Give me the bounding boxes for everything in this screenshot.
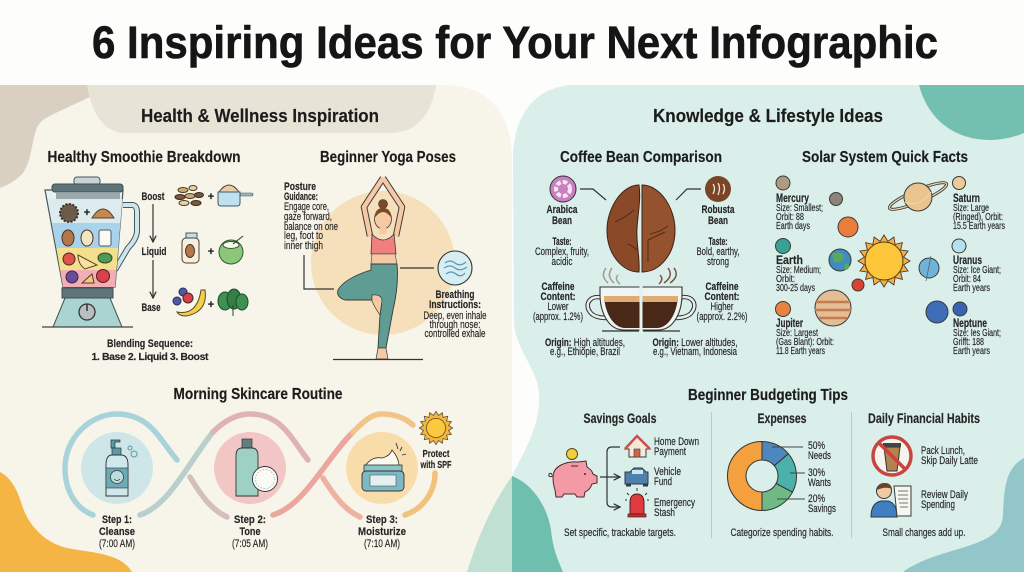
- text: robusta: e.g., Vietnam, Indonesia: [653, 346, 738, 358]
- text: jupiter: Jupiter: [776, 317, 803, 330]
- heading: Coffee Bean Comparison: [560, 149, 722, 166]
- text: breathing instructions: Instructions:: [429, 299, 481, 311]
- section: skincare routine: [65, 386, 453, 550]
- text: posture guidance: Guidance:: [284, 191, 318, 203]
- step 2 label: Tone: [240, 526, 260, 538]
- icon: sun: [858, 235, 910, 287]
- icon: car: [625, 468, 648, 486]
- step 1 circle and cleanser: [81, 432, 153, 504]
- step 3 label: Moisturize: [358, 526, 406, 538]
- text: breathing instructions: [424, 289, 486, 340]
- icon: robusta steam over cup: [659, 268, 676, 284]
- donut labels: Needs: [808, 450, 831, 462]
- text: mercury: [776, 192, 823, 232]
- heading: Healthy Smoothie Breakdown: [48, 149, 240, 166]
- text: jupiter: [776, 317, 834, 357]
- icon: almond milk and coconut: [182, 233, 243, 264]
- text: savings targets: Emergency: [654, 497, 695, 509]
- section: budgeting tips: [549, 387, 980, 539]
- protect with SPF label: [420, 448, 452, 471]
- protect with SPF label: Protect: [422, 448, 450, 460]
- text: arabica: (approx. 1.2%): [533, 311, 583, 323]
- text: breathing instructions: Deep, even inhale: [424, 310, 486, 322]
- text: uranus: Uranus: [953, 254, 982, 267]
- text: arabica: Complex, fruity,: [535, 246, 589, 258]
- donut chart: [728, 442, 797, 510]
- text: mercury: Orbit: 88: [776, 212, 804, 223]
- text: posture guidance: inner thigh: [284, 240, 323, 252]
- text: arabica: Origin: High altitudes,: [545, 337, 625, 349]
- text: robusta: Origin: Lower altitudes,: [652, 337, 738, 349]
- icon: coffee cup: [588, 285, 694, 333]
- section: solar system: [776, 149, 1005, 357]
- text: habits: [921, 445, 978, 511]
- text: uranus: Size: Ice Giant;: [953, 265, 1001, 276]
- figure: tree pose: [333, 178, 423, 360]
- text: earth: 300-25 days: [776, 283, 815, 294]
- text: posture guidance: balance on one: [284, 221, 338, 233]
- subheading: daily habits: Daily Financial Habits: [868, 411, 980, 426]
- title: 6 Inspiring Ideas for Your Next Infographic: [92, 17, 938, 68]
- label: liquid: Liquid: [142, 246, 166, 258]
- text: arabica: Content:: [540, 291, 576, 303]
- ribbon path: [65, 414, 435, 517]
- icon: no coffee: [873, 437, 911, 475]
- text: robusta: Robusta: [702, 204, 735, 216]
- text: posture guidance: Posture: [284, 181, 316, 193]
- label: base: Base: [142, 302, 160, 314]
- caption: expenses: Categorize spending habits.: [730, 527, 834, 539]
- text: saturn: [953, 192, 1005, 232]
- icon: piggy bank: [549, 448, 597, 497]
- step 2 label: Step 2:: [234, 514, 266, 526]
- text: savings targets: Fund: [654, 476, 672, 488]
- blending sequence note: Blending Sequence:: [107, 338, 193, 350]
- donut labels: 30%: [808, 467, 825, 479]
- text: saturn: Saturn: [953, 192, 980, 205]
- icon: SPF sun: [419, 411, 453, 445]
- text: savings targets: Payment: [654, 446, 686, 458]
- text: mercury: Size: Smallest;: [776, 203, 823, 214]
- text: savings targets: Home Down: [654, 436, 699, 448]
- text: mercury: Earth days: [776, 221, 810, 232]
- text: savings targets: [654, 436, 699, 519]
- step 2 label: (7:05 AM): [232, 538, 268, 550]
- text: robusta: Higher: [710, 301, 734, 313]
- icon: siren: [625, 488, 649, 517]
- donut labels: Wants: [808, 477, 831, 489]
- text: arabica: Arabica: [546, 204, 578, 216]
- step 3 label: Step 3:: [366, 514, 398, 526]
- background circle: [311, 191, 455, 335]
- step 3 label: [358, 514, 406, 550]
- heading: Morning Skincare Routine: [174, 386, 343, 403]
- step 2 label: [232, 514, 268, 550]
- icon: person reviewing receipt: [871, 483, 911, 517]
- text: uranus: Orbit: 84: [953, 274, 981, 285]
- text: robusta: (approx. 2.2%): [696, 311, 748, 323]
- text: robusta: Caffeine: [706, 281, 738, 293]
- text: posture guidance: [284, 181, 338, 252]
- text: earth: Size: Medium;: [776, 265, 821, 276]
- panel: health and wellness: [0, 85, 512, 572]
- arrow: liquid to base: [152, 260, 154, 298]
- step 1 label: [99, 514, 135, 550]
- icon: coffee bean: [607, 185, 675, 272]
- text: robusta: Bean: [708, 215, 728, 227]
- text: habits: Pack Lunch,: [921, 445, 965, 457]
- text: robusta: [652, 204, 748, 358]
- section: coffee comparison: [533, 149, 748, 358]
- section: yoga poses: [284, 149, 486, 360]
- donut labels: 50%: [808, 440, 825, 452]
- step 1 label: Cleanse: [99, 526, 135, 538]
- donut labels: Savings: [808, 503, 836, 515]
- text: arabica: e.g., Ethiopie, Brazil: [550, 346, 620, 358]
- text: arabica: Bean: [552, 215, 572, 227]
- text: savings targets: Stash: [654, 507, 675, 519]
- heading: Beginner Yoga Poses: [320, 149, 456, 166]
- planet icons: legend: [776, 176, 967, 316]
- text: uranus: Earth years: [953, 283, 990, 294]
- text: arabica: Taste:: [552, 236, 572, 248]
- heading: Beginner Budgeting Tips: [688, 387, 848, 404]
- text: jupiter: 11.8 Earth years: [776, 346, 825, 357]
- text: neptune: Earth years: [953, 346, 990, 357]
- text: breathing instructions: Breathing: [436, 289, 474, 301]
- step 1 label: Step 1:: [102, 514, 132, 526]
- icon: almond milk and coconut: +: [208, 246, 214, 258]
- text: neptune: Grifft: 188: [953, 337, 984, 348]
- icon: breath waves: [438, 251, 472, 285]
- text: habits: Review Daily: [921, 489, 968, 501]
- step 1 label: (7:00 AM): [99, 538, 135, 550]
- blending sequence note: 1. Base 2. Liquid 3. Boost: [92, 351, 209, 363]
- arrow: boost to liquid: [152, 204, 154, 242]
- icon: blender: +: [84, 207, 90, 219]
- text: habits: Skip Daily Latte: [921, 455, 978, 467]
- text: posture guidance: Engage core,: [284, 201, 329, 213]
- icon: seeds and protein scoop: [175, 185, 253, 206]
- text: earth: Earth: [776, 254, 803, 267]
- text: arabica: Caffeine: [542, 281, 574, 293]
- planets: orbit scene: [815, 178, 949, 326]
- panel heading: Health & Wellness Inspiration: [141, 105, 379, 126]
- section: smoothie breakdown: [40, 149, 253, 363]
- text: neptune: [953, 317, 1001, 357]
- step 2 circle and toner: [214, 432, 286, 504]
- text: jupiter: (Gas Blant): Orbit:: [776, 337, 834, 348]
- text: earth: [776, 254, 821, 294]
- text: neptune: Neptune: [953, 317, 987, 330]
- dividers: [712, 412, 852, 538]
- protect with SPF label: with SPF: [420, 459, 452, 471]
- blending sequence note: [92, 338, 209, 363]
- text: robusta: Bold, earthy,: [696, 246, 740, 258]
- subheading: savings goals: Savings Goals: [584, 411, 656, 426]
- icon: house: [625, 436, 650, 457]
- text: habits: Spending: [921, 499, 955, 511]
- text: breathing instructions: controlled exhale: [424, 328, 486, 340]
- text: jupiter: Size: Largest: [776, 328, 818, 339]
- icon: berries banana and spinach: [173, 288, 248, 316]
- text: arabica: Lower: [548, 301, 569, 313]
- text: saturn: Size: Large: [953, 203, 989, 214]
- text: posture guidance: gaze forward,: [284, 211, 332, 223]
- icon: berries banana and spinach: +: [208, 299, 214, 311]
- text: posture guidance: leg, foot to: [284, 230, 323, 242]
- step 3 label: (7:10 AM): [364, 538, 400, 550]
- icon: robusta steam: [705, 176, 731, 202]
- caption: habits: Small changes add up.: [882, 527, 966, 539]
- icon: seeds and protein scoop: +: [208, 191, 214, 203]
- donut labels: [808, 440, 836, 515]
- panel heading: Knowledge & Lifestyle Ideas: [653, 105, 883, 126]
- text: neptune: Size: Ies Giant;: [953, 328, 1001, 339]
- text: uranus: [953, 254, 1001, 294]
- step 3 circle and moisturizer: [346, 432, 418, 504]
- donut labels: 20%: [808, 493, 825, 505]
- donut leader lines: [772, 447, 805, 499]
- icon: arabica flower: [550, 176, 576, 202]
- text: saturn: (Ringed), Orbit:: [953, 212, 1003, 223]
- connector lines: [580, 189, 701, 200]
- text: breathing instructions: through nose:: [430, 319, 480, 331]
- text: robusta: Content:: [704, 291, 740, 303]
- label: boost: Boost: [142, 191, 165, 203]
- text: robusta: strong: [707, 256, 729, 268]
- text: earth: Orbit:: [776, 274, 795, 285]
- arrows: savings branches: [600, 447, 620, 507]
- text: robusta: Taste:: [708, 236, 728, 248]
- panel: knowledge and lifestyle: [512, 85, 1024, 572]
- text: arabica: acidic: [552, 256, 573, 268]
- heading: Solar System Quick Facts: [802, 149, 968, 166]
- connector: posture guidance: [304, 255, 334, 289]
- subheading: expenses: Expenses: [758, 411, 806, 426]
- text: savings targets: Vehicle: [654, 466, 681, 478]
- icon: steam: [603, 268, 620, 284]
- icon: blender: [40, 177, 137, 327]
- caption: savings: Set specific, trackable targets.: [564, 527, 676, 539]
- connector: breathing: [400, 267, 434, 269]
- text: arabica: [533, 204, 625, 358]
- text: mercury: Mercury: [776, 192, 809, 205]
